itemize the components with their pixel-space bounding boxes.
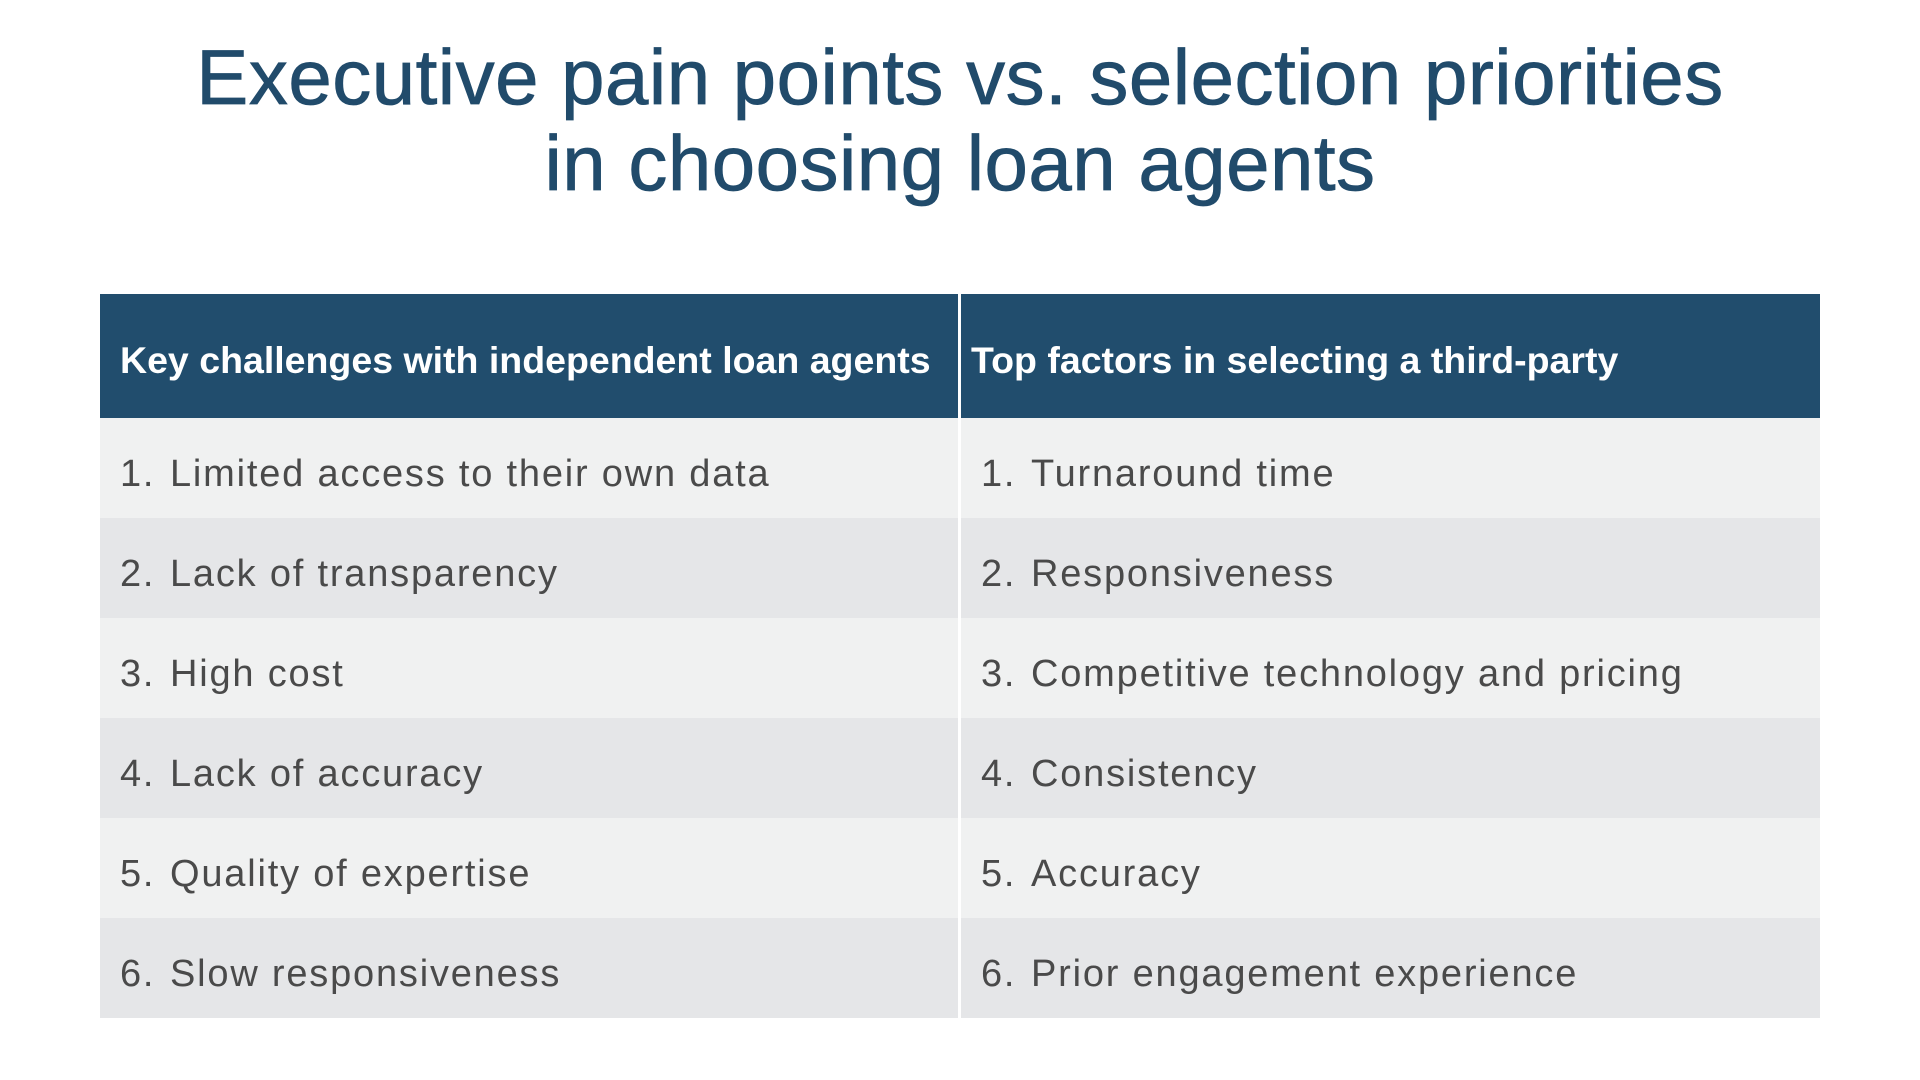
header: top factors: Top factors in selecting a third-party xyxy=(971,339,1618,381)
left column rows: 1. xyxy=(120,453,155,495)
right column rows: 4. xyxy=(981,753,1016,795)
left column rows: Lack of transparency xyxy=(170,553,559,595)
left column rows: Limited access to their own data xyxy=(170,453,770,495)
header: key challenges: Key challenges with independent loan agents xyxy=(120,339,931,381)
title: Executive pain points vs. selection priorities xyxy=(196,33,1724,121)
left column rows: High cost xyxy=(170,653,345,695)
left column rows xyxy=(100,418,958,1018)
right column rows: 2. xyxy=(981,553,1016,595)
right column rows: Prior engagement experience xyxy=(1031,953,1578,995)
table xyxy=(100,294,1820,1018)
left column rows: 4. xyxy=(120,753,155,795)
header: key challenges xyxy=(100,294,958,418)
right column rows: Turnaround time xyxy=(1031,453,1335,495)
right column rows: Consistency xyxy=(1031,753,1258,795)
right column rows: Responsiveness xyxy=(1031,553,1335,595)
left column rows: 3. xyxy=(120,653,155,695)
right column rows: Competitive technology and pricing xyxy=(1031,653,1684,695)
title: in choosing loan agents xyxy=(544,119,1376,207)
right column rows: 5. xyxy=(981,853,1016,895)
left column rows: Slow responsiveness xyxy=(170,953,561,995)
right column rows: 6. xyxy=(981,953,1016,995)
right column rows xyxy=(961,418,1820,1018)
header: top factors xyxy=(961,294,1820,418)
right column rows: 3. xyxy=(981,653,1016,695)
left column rows: 5. xyxy=(120,853,155,895)
left column rows: Quality of expertise xyxy=(170,853,531,895)
left column rows: Lack of accuracy xyxy=(170,753,484,795)
right column rows: Accuracy xyxy=(1031,853,1202,895)
left column rows: 2. xyxy=(120,553,155,595)
right column rows: 1. xyxy=(981,453,1016,495)
title xyxy=(196,33,1724,207)
left column rows: 6. xyxy=(120,953,155,995)
